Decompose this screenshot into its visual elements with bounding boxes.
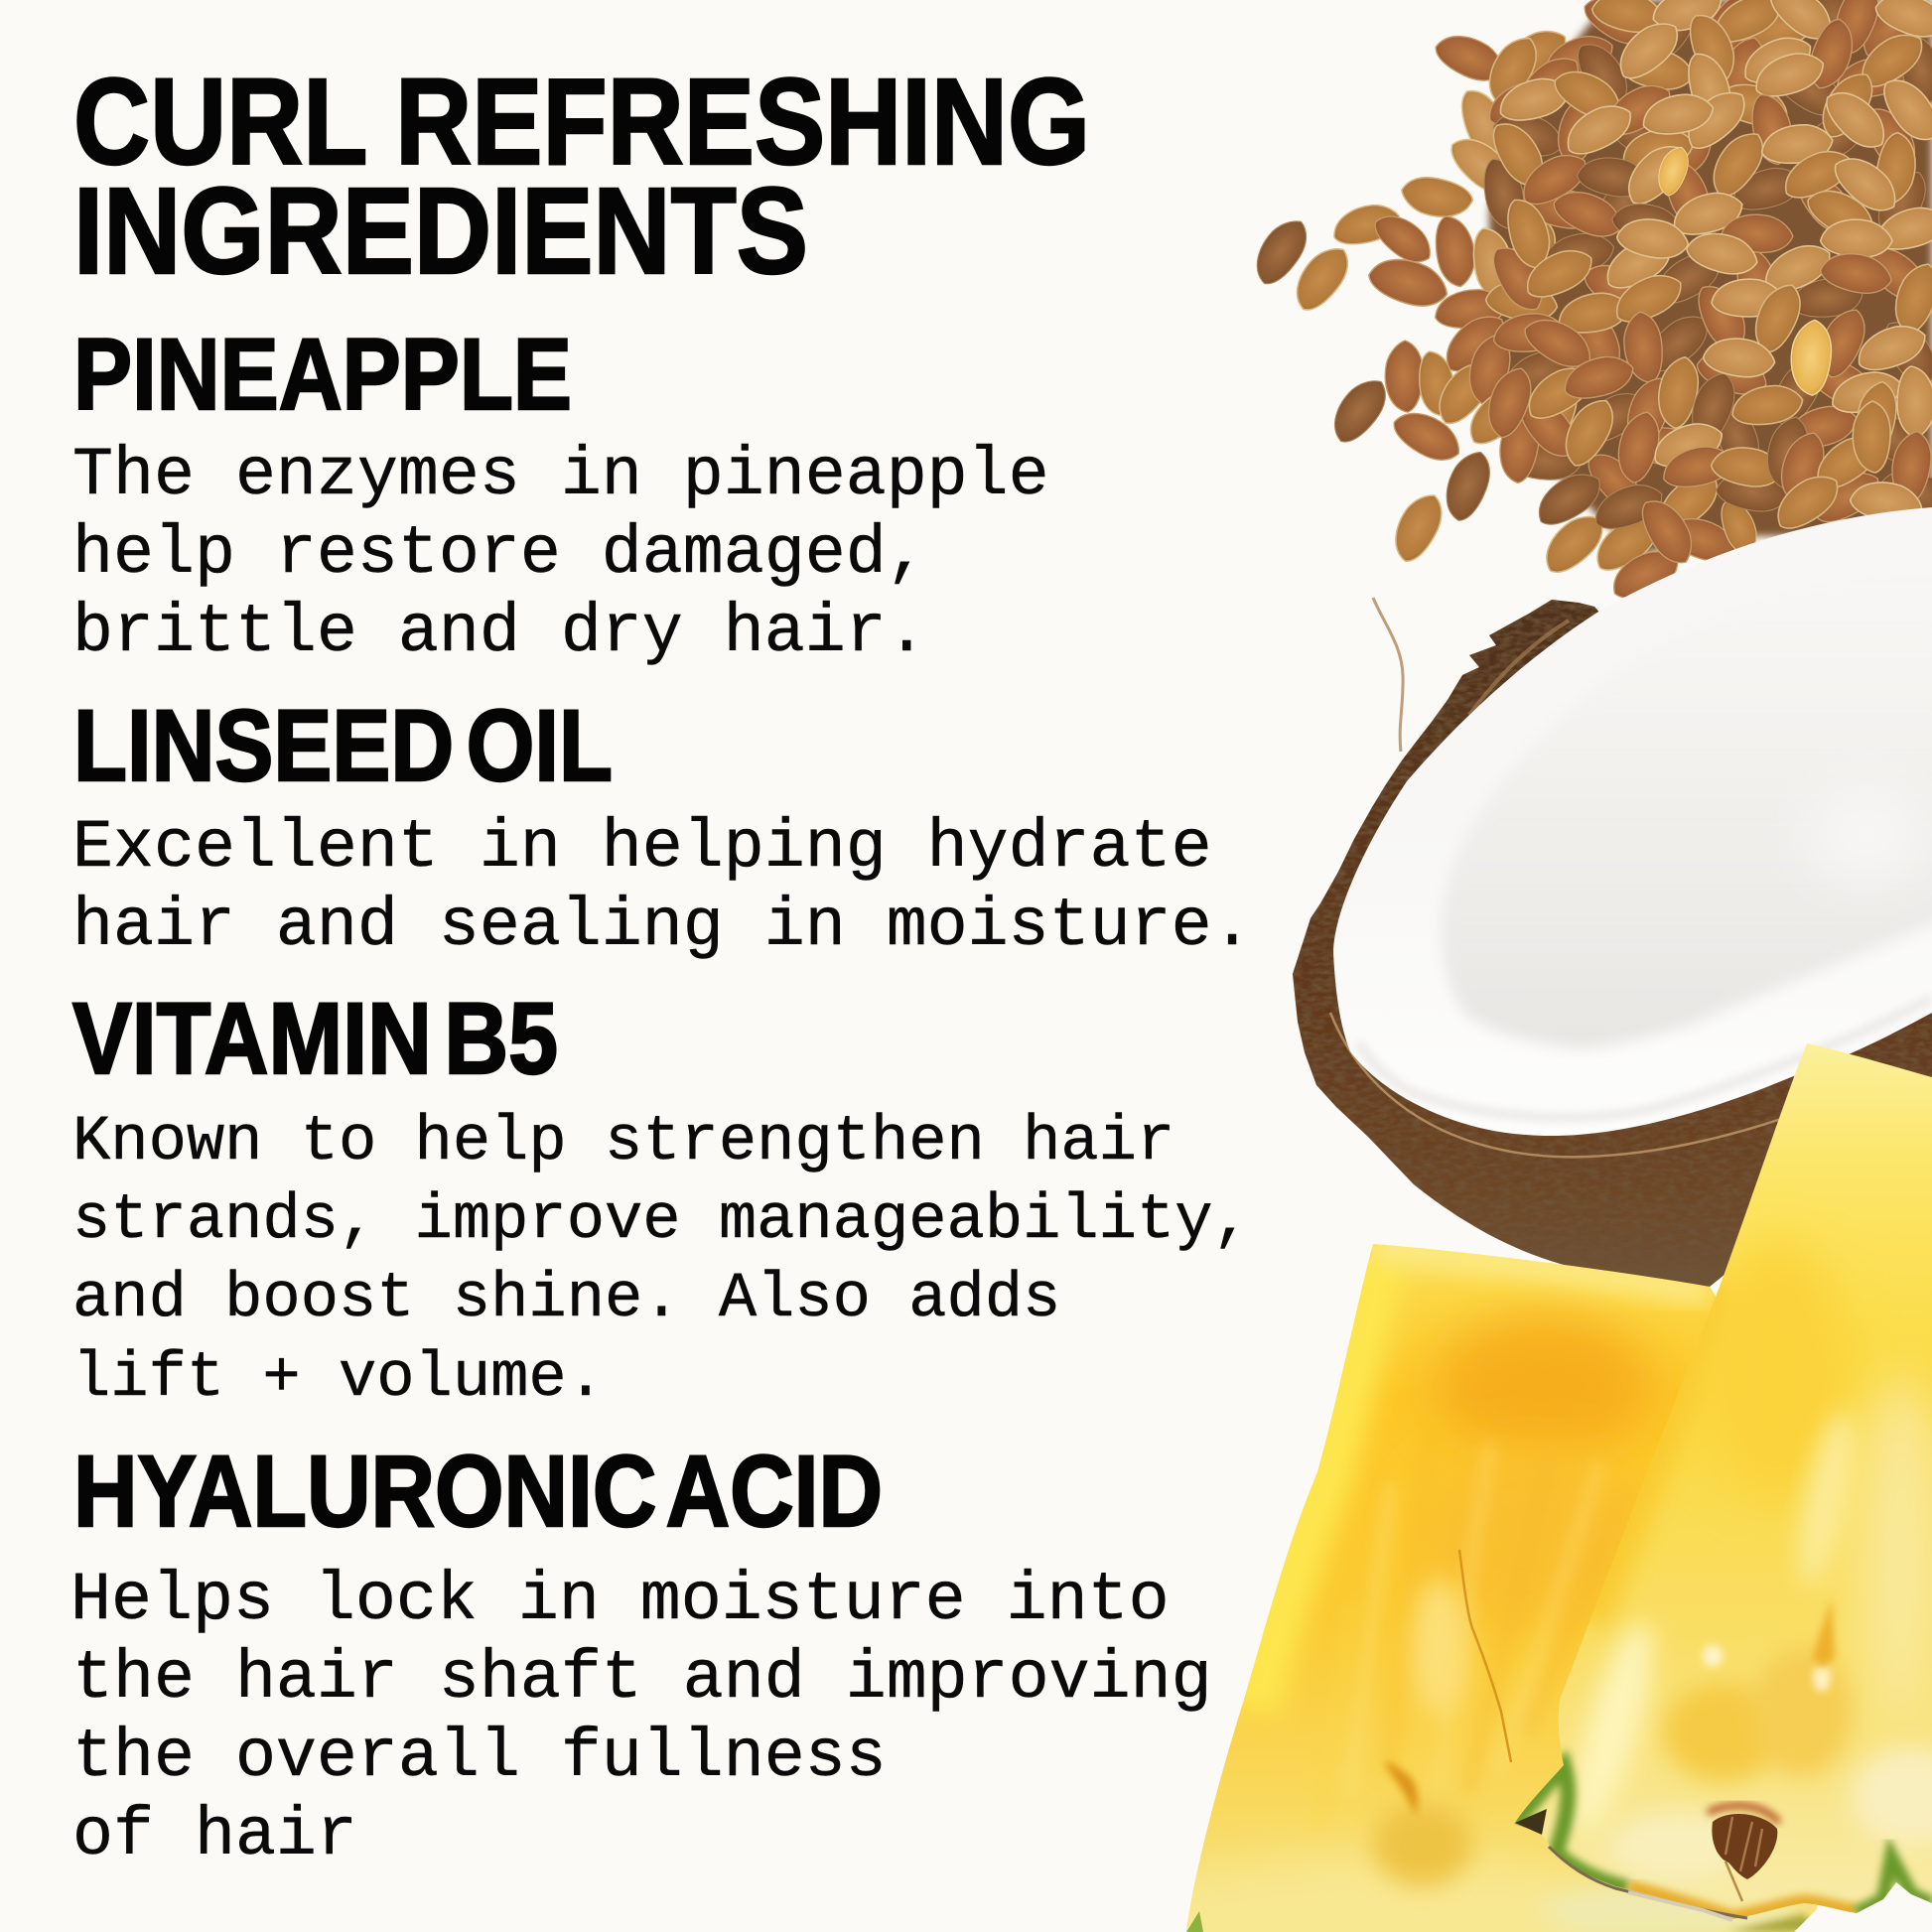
coconut cavity shading [1442,790,1932,1051]
pineapple rind [1514,1765,1628,1888]
heading: pineapple: PINEAPPLE [73,318,572,431]
text: linseed oil description [72,809,1253,965]
image: halved coconut [1293,507,1932,1287]
section: hyaluronic acid [70,1435,1212,1874]
text: vitamin b5 description [72,1107,1251,1415]
coconut flesh [1333,507,1932,1136]
image: pineapple wedges [1132,1043,1932,1932]
left pineapple wedge [1186,1244,1837,1932]
base layer of pile [1479,0,1932,572]
text: hyaluronic acid description: the hair shaft and improving [72,1640,1212,1718]
coconut fibre string [1373,598,1403,752]
text: hyaluronic acid description: of hair [72,1797,357,1874]
coconut shell [1293,600,1932,1287]
shell fibre ring [1330,1013,1807,1157]
text: pineapple description: help restore damaged, [72,515,927,593]
text: pineapple description: The enzymes in pineapple [72,437,1049,514]
left wedge fibres [1345,1442,1607,1790]
text: hyaluronic acid description: Helps lock in moisture into [70,1562,1170,1639]
text: pineapple description [72,437,1049,671]
text: hyaluronic acid description [70,1562,1212,1874]
pineapple core seed [1708,1806,1779,1901]
right pineapple wedge [1514,1043,1932,1919]
title: CURL REFRESHING [73,55,1090,191]
section: pineapple [72,318,1049,671]
crack and blemish on left wedge [1459,1550,1511,1762]
text: pineapple description: brittle and dry hair. [72,594,927,671]
heading: linseed oil: LINSEED OIL [73,689,613,802]
heading: vitamin b5: VITAMIN B5 [72,982,558,1095]
section: linseed oil [72,689,1253,965]
title [73,55,1090,300]
text: vitamin b5 description: and boost shine. Also adds [72,1264,1060,1335]
text: linseed oil description: Excellent in helping hydrate [72,809,1212,887]
section: vitamin b5 [72,982,1251,1415]
text: vitamin b5 description: Known to help strengthen hair [72,1107,1174,1178]
heading: hyaluronic acid: HYALURONIC ACID [73,1435,883,1548]
title: INGREDIENTS [73,164,808,300]
pineapple husk edge [1549,1847,1747,1918]
text: hyaluronic acid description: the overall fullness [72,1719,887,1796]
image: pile of linseed (flax) seeds [1245,0,1932,606]
text: linseed oil description: hair and sealing in moisture. [72,888,1253,965]
top layer of pile [1479,0,1932,537]
text: vitamin b5 description: strands, improve manageability, [72,1185,1251,1257]
text: vitamin b5 description: lift + volume. [72,1343,605,1415]
